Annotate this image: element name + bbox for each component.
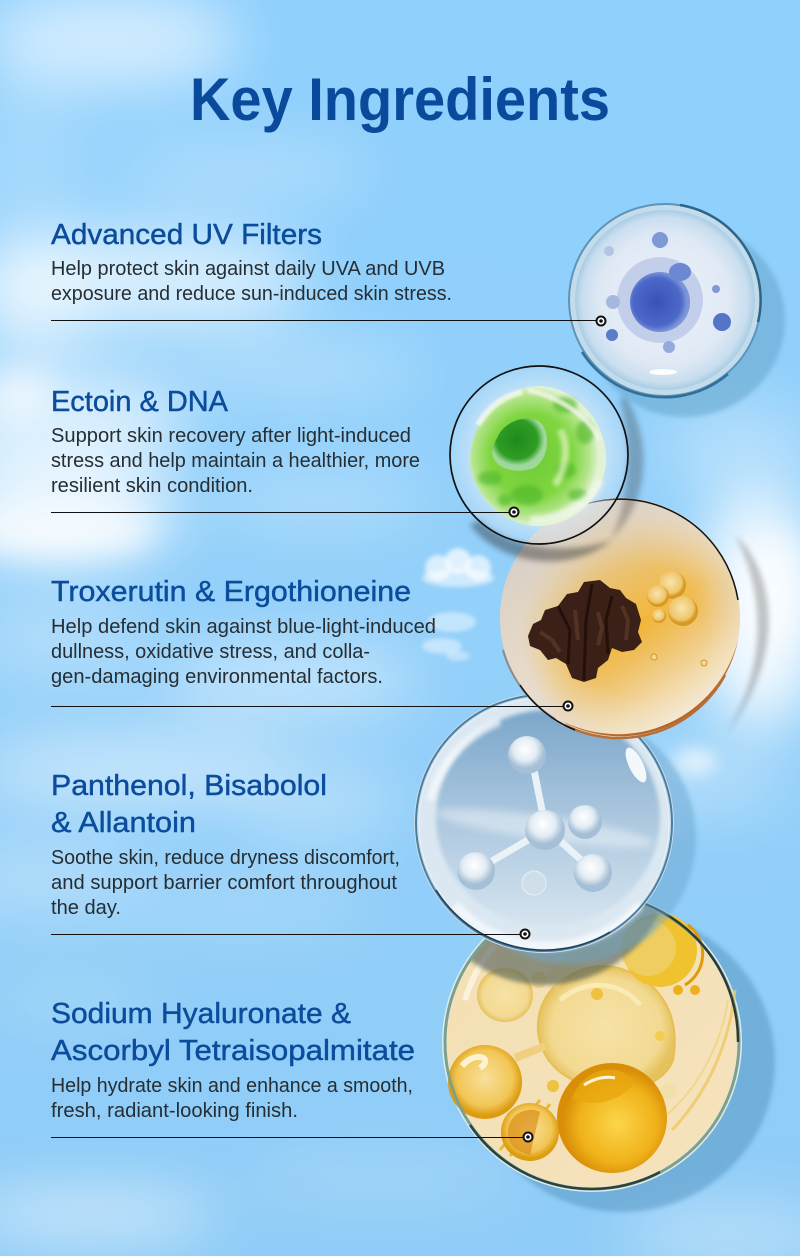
- text block: Advanced UV Filters: exposure and reduce sun-induced skin stress.: [51, 283, 452, 305]
- ingredient image 4: clear molecule dish: [414, 693, 696, 964]
- text block: Panthenol, Bisabolol & Allantoin: Soothe skin, reduce dryness discomfort,: [51, 847, 400, 869]
- title: Key Ingredients: [190, 66, 610, 133]
- text block: Troxerutin & Ergothioneine: gen-damaging environmental factors.: [51, 666, 383, 688]
- root chunk: [528, 580, 642, 682]
- text block: Panthenol, Bisabolol & Allantoin: [51, 770, 400, 919]
- ingredient image 2: green gel bubble: [450, 366, 644, 561]
- text block: Advanced UV Filters: [51, 219, 452, 305]
- callout line: Sodium Hyaluronate: [51, 1132, 532, 1142]
- text block: Ectoin & DNA: resilient skin condition.: [51, 475, 253, 497]
- callout line: Ectoin: [51, 508, 518, 516]
- callout line: Panthenol: [51, 930, 530, 938]
- text block: Panthenol, Bisabolol & Allantoin: & Allantoin: [51, 807, 196, 839]
- ingredient image 5: golden oil droplets dish: [442, 902, 776, 1214]
- text block: Panthenol, Bisabolol & Allantoin: and support barrier comfort throughout: [51, 872, 397, 894]
- shadow cast by the clear dish: [470, 906, 661, 988]
- text block: Sodium Hyaluronate & Ascorbyl Tetraisopalmitate: Sodium Hyaluronate &: [51, 998, 351, 1030]
- text block: Troxerutin & Ergothioneine: Help defend skin against blue-light-induced: [51, 616, 436, 638]
- text block: Sodium Hyaluronate & Ascorbyl Tetraisopalmitate: Ascorbyl Tetraisopalmitate: [51, 1035, 415, 1067]
- text block: Ectoin & DNA: stress and help maintain a healthier, more: [51, 450, 420, 472]
- callout line: UV filters: [51, 316, 606, 326]
- ingredient image 3: amber dish with root: [500, 498, 769, 738]
- text block: Advanced UV Filters: Help protect skin against daily UVA and UVB: [51, 258, 445, 280]
- text block: Troxerutin & Ergothioneine: Troxerutin & Ergothioneine: [51, 576, 411, 608]
- text block: Sodium Hyaluronate & Ascorbyl Tetraisopalmitate: fresh, radiant-looking finish.: [51, 1100, 298, 1122]
- oil bubbles: [647, 571, 707, 666]
- text block: Panthenol, Bisabolol & Allantoin: Panthenol, Bisabolol: [51, 770, 327, 802]
- ingredient image 1: cell petri dish: [568, 203, 785, 417]
- text block: Ectoin & DNA: Ectoin & DNA: [51, 386, 229, 418]
- text block: Sodium Hyaluronate & Ascorbyl Tetraisopalmitate: [51, 998, 415, 1122]
- text block: Troxerutin & Ergothioneine: [51, 576, 436, 688]
- text block: Panthenol, Bisabolol & Allantoin: the day.: [51, 897, 121, 919]
- text block: Sodium Hyaluronate & Ascorbyl Tetraisopalmitate: Help hydrate skin and enhance a smooth,: [51, 1075, 413, 1097]
- text block: Ectoin & DNA: Support skin recovery after light-induced: [51, 425, 411, 447]
- text block: Advanced UV Filters: Advanced UV Filters: [51, 219, 322, 251]
- text block: Troxerutin & Ergothioneine: dullness, oxidative stress, and colla-: [51, 641, 370, 663]
- callout line: Troxerutin: [51, 702, 572, 710]
- text block: Ectoin & DNA: [51, 386, 420, 497]
